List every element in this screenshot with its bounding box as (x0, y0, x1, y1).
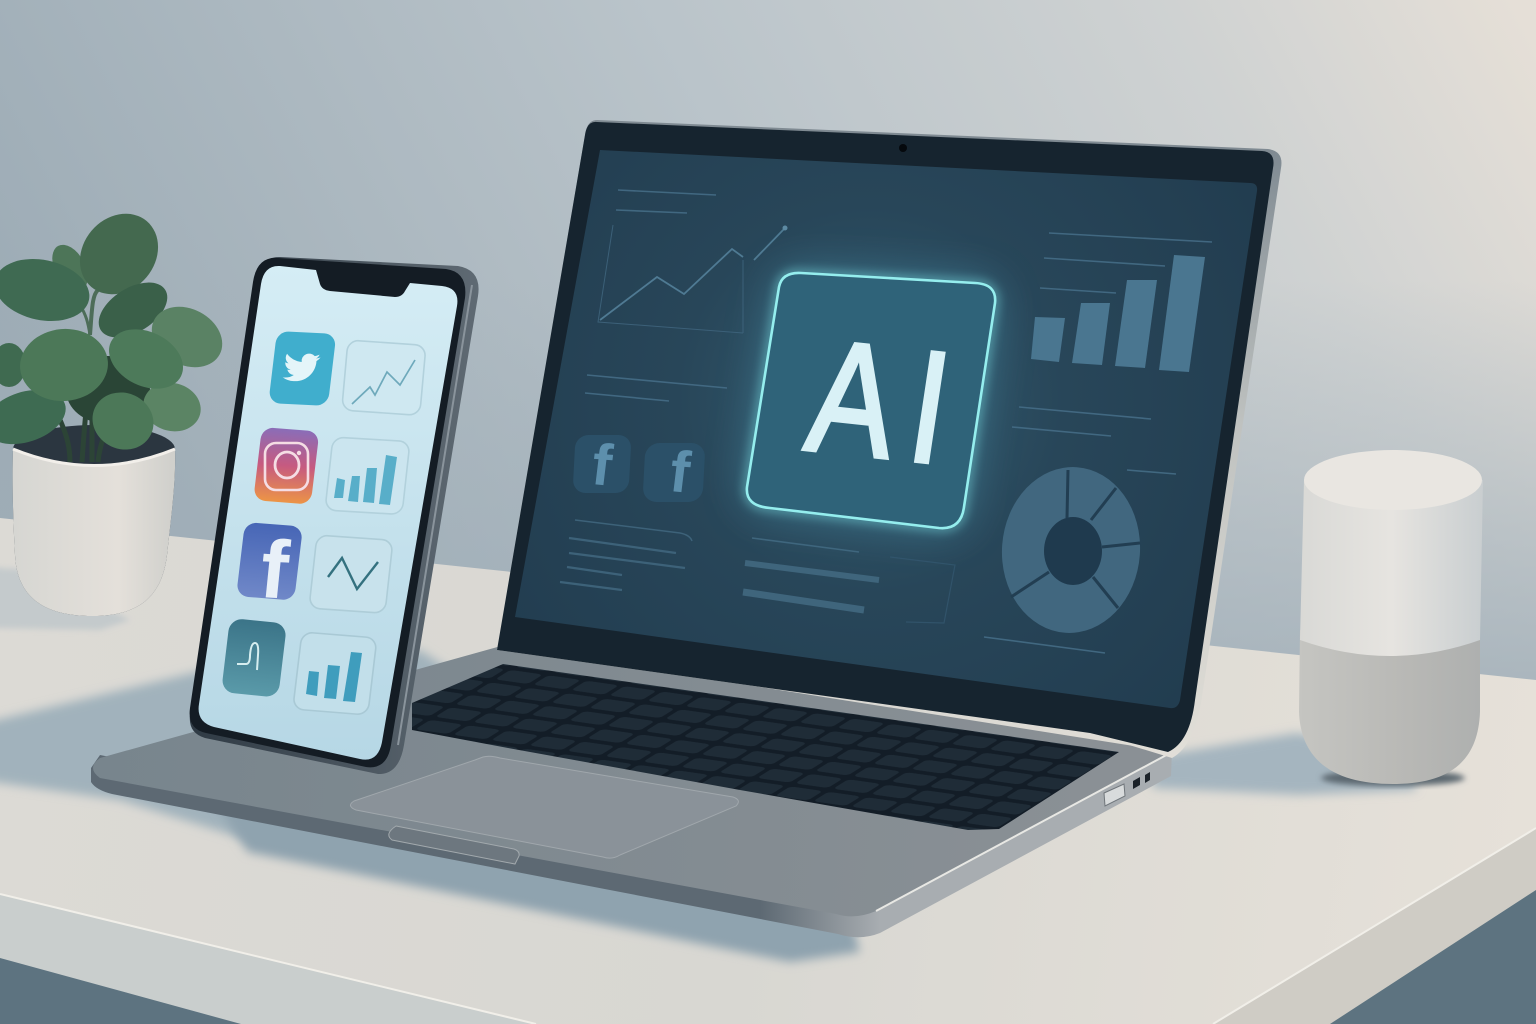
AI badge (747, 273, 995, 528)
lid bezel (497, 122, 1274, 752)
AI label: AI (798, 306, 978, 499)
keyboard (412, 664, 1119, 830)
laptop screen (515, 150, 1257, 708)
plant stems (58, 290, 120, 462)
smart speaker (1299, 450, 1483, 786)
AI badge glow (747, 273, 995, 528)
phone screen (199, 266, 457, 760)
app icon: teal analytics (221, 618, 287, 698)
text panel left (560, 520, 692, 590)
speaker fabric base (1299, 630, 1480, 784)
plant pot (13, 425, 175, 616)
chart card 2 (325, 437, 410, 515)
laptop (91, 120, 1281, 937)
trackpad (350, 756, 738, 858)
webcam (899, 144, 907, 152)
cast shadows on desk (0, 567, 1420, 962)
facebook tile 1: f (588, 432, 616, 499)
phone side highlight (398, 285, 472, 745)
phone metal side (190, 257, 479, 774)
plant (0, 198, 233, 616)
facebook tile 2: f (666, 439, 694, 506)
desk (0, 518, 1536, 1024)
laptop base deck (93, 646, 1172, 916)
port: usb-c (1104, 784, 1125, 806)
lid silver rim (497, 120, 1281, 758)
facebook tile 2 (642, 439, 706, 506)
app icon: facebook (236, 522, 303, 616)
chart card 4 (293, 632, 377, 715)
facebook tile 1 (573, 432, 632, 499)
app icon: twitter (268, 331, 336, 406)
phone black frame (190, 258, 465, 767)
speaker top (1304, 450, 1482, 510)
speaker contact shadow (1321, 770, 1465, 786)
wireframe text lines (585, 190, 1212, 653)
text panel centre (743, 538, 955, 623)
area under the desk (0, 880, 1536, 1024)
laptop base side (91, 750, 1172, 937)
speaker white body (1300, 480, 1483, 656)
donut chart (996, 462, 1146, 638)
plant leaves (0, 198, 233, 459)
front notch (389, 826, 519, 864)
line chart (598, 225, 788, 333)
chart card 3 (309, 535, 393, 613)
facebook letter: f (256, 524, 293, 616)
ports: small (1133, 772, 1150, 789)
app icon: instagram (253, 427, 319, 505)
bar chart (1031, 255, 1205, 372)
chart card 1 (342, 340, 426, 415)
screen background (515, 150, 1257, 708)
smartphone (190, 257, 479, 774)
